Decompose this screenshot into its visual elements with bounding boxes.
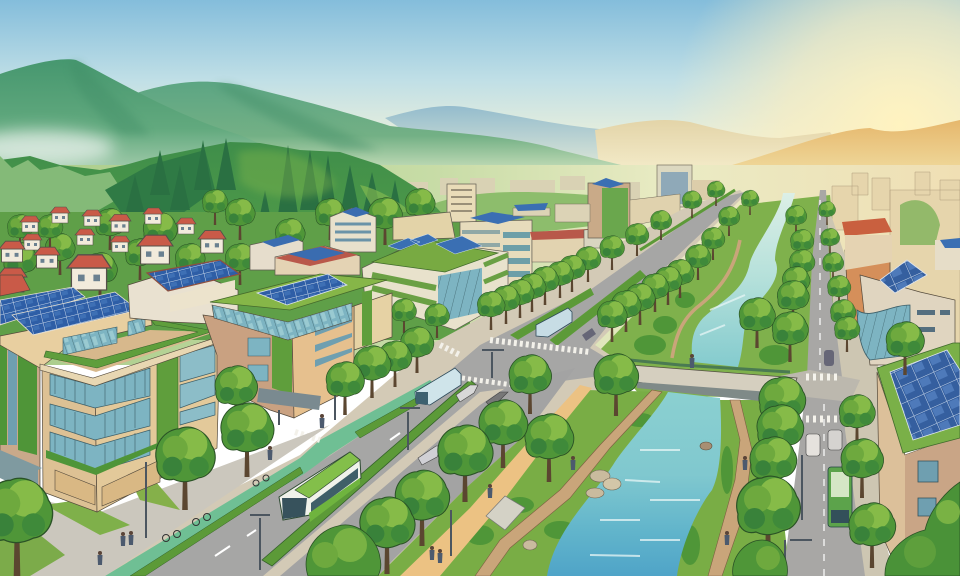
- terrace hedge: [44, 319, 214, 368]
- left facade: [203, 315, 294, 418]
- right boardwalk: [708, 400, 752, 576]
- rocks: [523, 442, 712, 550]
- forest hill: [0, 138, 470, 300]
- building: green terrace building: [362, 234, 508, 330]
- rear wall with vertical garden: [0, 336, 40, 495]
- green roof: [877, 343, 960, 453]
- upper bank shrubs: [634, 292, 791, 365]
- front-left plaza and garden: [0, 425, 330, 576]
- tree: bottom-centre canopy: [306, 525, 381, 576]
- glass curve: [857, 305, 910, 360]
- right facade: [292, 306, 354, 418]
- building: bottom-right solar roof: [877, 343, 960, 576]
- people: [98, 354, 748, 565]
- bank shrubs: [466, 413, 733, 565]
- cyclists: [162, 475, 269, 542]
- side wing: [354, 293, 392, 350]
- windows: [918, 461, 938, 516]
- river banks: [378, 240, 791, 576]
- mountain: left green ridge: [0, 59, 330, 175]
- lane dashes: [215, 433, 400, 556]
- bus: right road: [828, 467, 852, 527]
- distant town skyline: [405, 165, 960, 345]
- vertical garden: [362, 290, 372, 346]
- building: brick mid blocks: [530, 228, 610, 262]
- river: [523, 193, 795, 576]
- cars: [806, 350, 842, 456]
- building: slim cream tower: [447, 184, 476, 222]
- bus: distant blue bus: [536, 308, 572, 337]
- facade: [877, 372, 960, 576]
- building: corner building with green terrace: [0, 287, 221, 512]
- building: low tan block: [393, 212, 455, 240]
- bus: far blue bus: [415, 368, 461, 405]
- solar panel: [257, 274, 347, 305]
- distant town ground: [0, 165, 960, 365]
- mountain: distant blue ridge: [385, 106, 690, 175]
- crosswalks: [806, 377, 843, 419]
- vertical garden: [157, 357, 178, 446]
- cars: [418, 328, 596, 465]
- tree: bottom-right of river canopy: [733, 540, 787, 576]
- trees: foreground: [0, 478, 960, 576]
- mist: [0, 130, 115, 166]
- orange footpath: [400, 385, 592, 576]
- building: red roof block: [275, 246, 360, 275]
- crosswalks: [295, 340, 590, 440]
- mid-town buildings: [250, 178, 680, 330]
- rooftop solar: [880, 260, 927, 293]
- mountain shading: [70, 62, 380, 150]
- bike lane: [105, 380, 436, 576]
- building: low tan blocks by road: [513, 194, 680, 226]
- upper storey: [0, 306, 152, 368]
- mountains: [0, 59, 960, 185]
- tree: bottom-left: [0, 478, 53, 576]
- trees: between road and river: [360, 354, 639, 574]
- trees: building-side row: [156, 299, 450, 510]
- mountain: second green ridge: [130, 82, 650, 172]
- lower green planter: [46, 442, 162, 475]
- solar array: [890, 350, 960, 440]
- sky: [0, 0, 960, 200]
- terrace: [50, 330, 215, 372]
- trees: right bank rows: [739, 201, 860, 362]
- main road and intersection: [60, 190, 745, 576]
- right bank ground: [600, 195, 850, 400]
- right facade: [95, 336, 220, 512]
- building: solar roof houses: [0, 260, 240, 325]
- right road: [770, 190, 865, 576]
- trees: right side of river: [737, 322, 924, 568]
- parapet: [40, 336, 221, 386]
- street lamps: [146, 350, 812, 574]
- glass bands: [50, 345, 215, 472]
- second carriageway: [280, 368, 575, 576]
- stairs: [486, 496, 525, 530]
- far green patch: [430, 192, 600, 240]
- bus: green city bus: [279, 452, 361, 522]
- ground floor shops: [55, 460, 160, 506]
- centre line: [820, 200, 824, 576]
- sidewalk: right of right road: [826, 200, 895, 576]
- upper glass: [63, 317, 145, 355]
- building: brick and cream block with green roof: [203, 274, 392, 418]
- left boardwalk: [475, 390, 662, 576]
- hillside houses and trees: [0, 189, 470, 340]
- tower: far glass tower: [657, 165, 692, 207]
- solar panels: [0, 287, 85, 325]
- green balconies: [272, 335, 292, 395]
- bridge: [630, 360, 797, 402]
- building: right round glass building: [842, 218, 960, 365]
- upper bank path: [672, 240, 740, 358]
- road surface: [145, 192, 745, 576]
- water highlights: [590, 295, 745, 556]
- mountain: sunset hills: [715, 120, 960, 185]
- median hedge: [262, 380, 476, 566]
- building: house with solar: [250, 235, 303, 270]
- glass ribbon: [212, 303, 352, 340]
- street trees: [0, 181, 960, 576]
- mountain: tan ridge: [595, 120, 860, 175]
- bike lane hedge: [130, 398, 420, 576]
- left facade: [42, 365, 97, 512]
- green roof: [210, 274, 387, 310]
- building: cream tower: [460, 212, 532, 290]
- trees: far road rows: [477, 181, 759, 342]
- small vehicles on main road: [279, 308, 596, 522]
- building: green wall tower: [588, 178, 630, 238]
- trees: bottom-right corner canopy: [885, 482, 960, 576]
- building: tower with solar roof: [330, 207, 376, 252]
